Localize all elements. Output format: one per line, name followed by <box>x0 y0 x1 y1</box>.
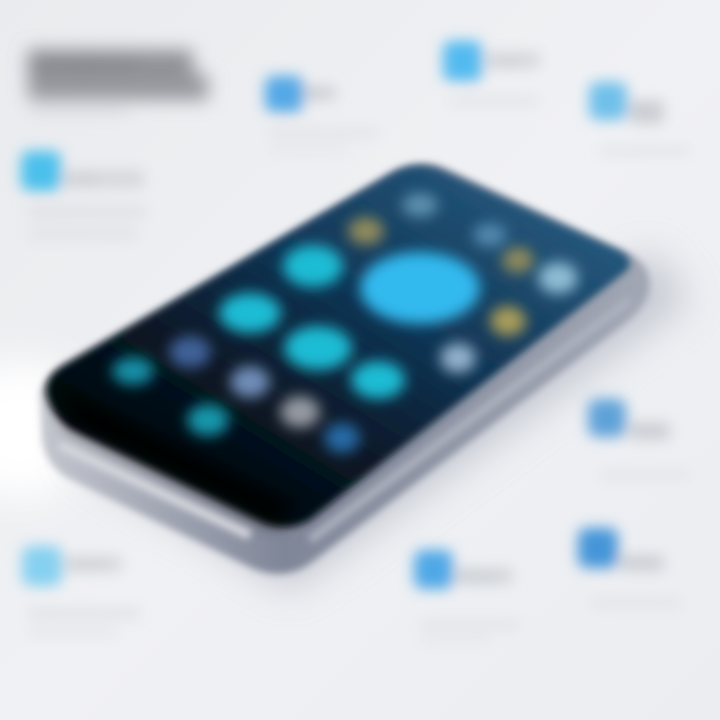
phone body <box>40 163 650 574</box>
callout: top centre-left <box>265 76 378 154</box>
callout: top right <box>589 82 690 156</box>
callout: top centre-left: App <box>304 87 324 99</box>
phone screen <box>46 166 630 527</box>
icon <box>443 41 482 81</box>
callout: top centre: Feature <box>486 57 524 69</box>
phone side highlight <box>310 300 630 540</box>
callout: right: Battery <box>630 425 665 437</box>
phone <box>40 163 650 574</box>
phone shadow <box>60 250 690 590</box>
heading: Smartphone <box>30 52 135 72</box>
callout: bottom centre <box>414 550 520 644</box>
app icons <box>112 193 578 453</box>
callout: top right: Tools <box>630 105 656 117</box>
callout: right <box>588 399 690 480</box>
callout: left: Design <box>64 173 98 185</box>
heading <box>28 50 208 114</box>
callout: left <box>21 151 146 240</box>
icon <box>21 151 61 191</box>
main app bubble <box>360 252 480 324</box>
icon <box>414 550 453 589</box>
icon <box>22 546 62 586</box>
yellow bubbles <box>348 217 534 336</box>
callout: bottom left: Network <box>66 559 107 571</box>
pale bubbles <box>169 193 578 453</box>
callout: bottom centre: Display <box>456 571 493 583</box>
icon <box>265 76 303 112</box>
callout: bottom right: Camera <box>620 557 660 569</box>
icon <box>589 82 627 120</box>
cyan bubbles <box>112 245 405 436</box>
callout: top centre <box>443 41 540 106</box>
icon <box>578 528 618 568</box>
callout: bottom left <box>22 546 140 637</box>
screen dark lower band <box>60 385 300 525</box>
callout: bottom right <box>578 528 680 608</box>
icon <box>588 399 626 437</box>
